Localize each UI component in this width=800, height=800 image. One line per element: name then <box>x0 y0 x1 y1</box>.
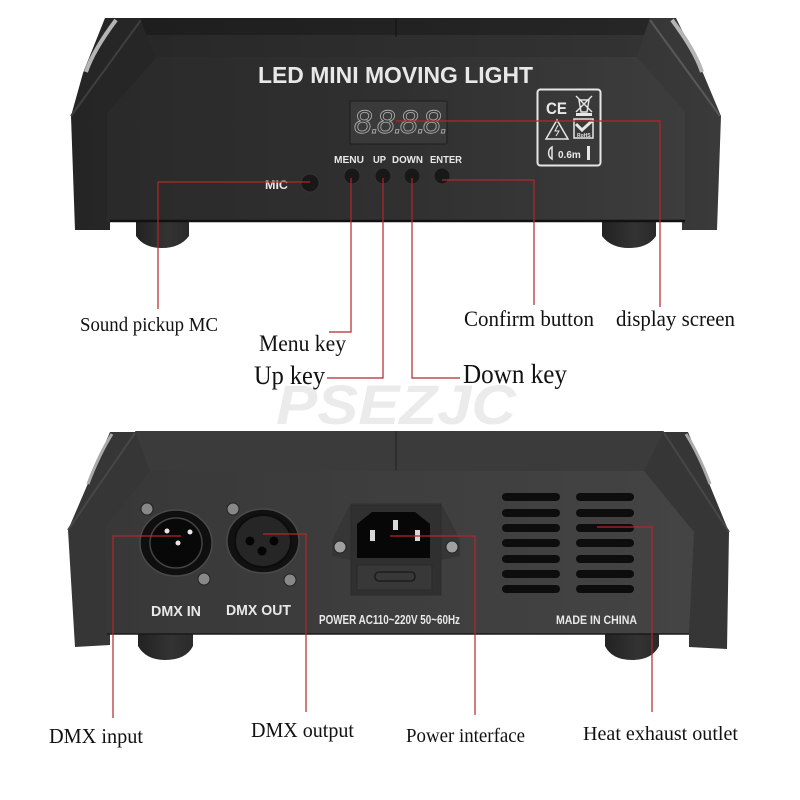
certification box: CE <box>546 99 567 118</box>
top band <box>135 431 664 471</box>
feet: bottom device <box>138 632 659 660</box>
callout lines <box>113 121 660 718</box>
chamfer ridge highlights <box>68 433 729 532</box>
recessed rear panel <box>105 471 694 634</box>
certification box <box>538 90 600 166</box>
power inlet <box>332 503 460 595</box>
certification box: RoHS <box>577 133 591 139</box>
callout labels: Heat exhaust outlet <box>583 723 738 745</box>
callout labels: Menu key <box>259 331 346 356</box>
callout labels: Up key <box>254 361 325 390</box>
connector: DMX input <box>140 503 212 585</box>
corner stripes <box>88 434 710 484</box>
back panel printed labels: MADE IN CHINA <box>556 615 637 627</box>
display screen: 8.8.8.8. <box>354 104 449 140</box>
panel: top device front <box>71 18 721 248</box>
watermark: PSEZJC <box>276 373 518 436</box>
certification box: 0.6m <box>558 150 581 161</box>
control buttons and microphone hole <box>301 168 450 192</box>
callout labels: Down key <box>463 359 567 389</box>
heat exhaust vents <box>502 493 634 593</box>
control labels <box>265 154 462 192</box>
callout labels: DMX input <box>49 724 143 748</box>
corner stripes <box>86 20 702 72</box>
recessed front panel <box>107 57 685 222</box>
device housing <box>71 18 721 230</box>
callout labels: display screen <box>616 306 735 331</box>
device housing <box>68 432 729 649</box>
feet: top device <box>136 220 656 248</box>
callout labels: Sound pickup MC <box>80 315 218 336</box>
back panel printed labels <box>151 602 637 627</box>
control labels: UP <box>373 154 386 166</box>
product title: LED MINI MOVING LIGHT <box>258 62 533 88</box>
back panel printed labels: DMX IN <box>151 603 201 620</box>
callout labels: DMX output <box>251 718 354 742</box>
control labels: MIC <box>265 178 288 192</box>
control labels: DOWN <box>392 154 423 166</box>
chamfer ridge highlights <box>71 20 720 116</box>
panel: bottom device back <box>68 431 729 660</box>
back panel printed labels: POWER AC110~220V 50~60Hz <box>319 612 460 627</box>
top band <box>140 18 650 35</box>
callout labels: Power interface <box>406 725 525 747</box>
control labels: MENU <box>334 154 364 166</box>
back panel printed labels: DMX OUT <box>226 602 291 619</box>
callout labels <box>49 306 738 748</box>
callout labels: Confirm button <box>464 306 594 331</box>
control labels: ENTER <box>430 154 462 166</box>
connector: DMX output <box>227 503 299 586</box>
